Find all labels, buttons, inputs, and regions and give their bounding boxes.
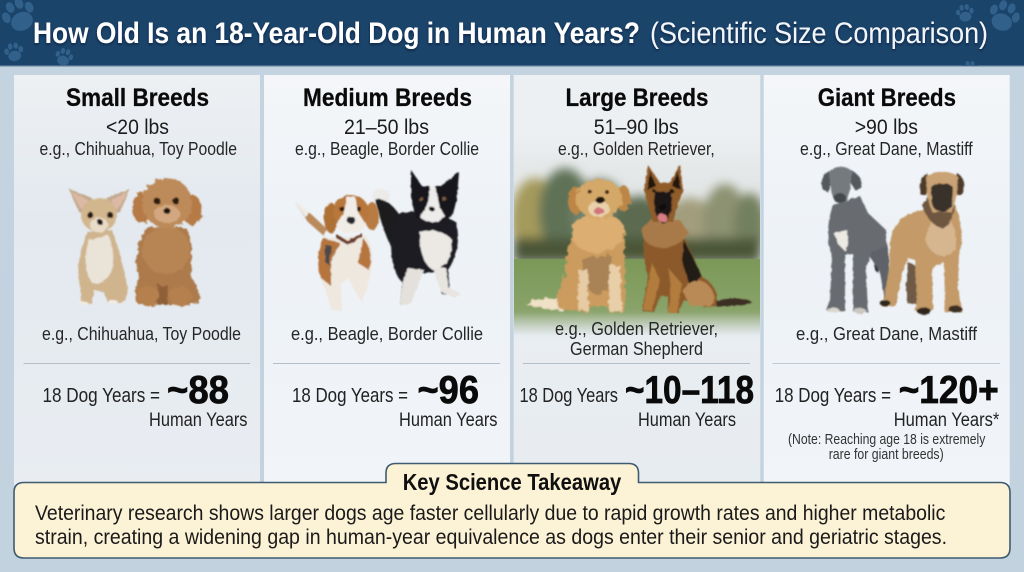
illustration: chihuahua	[69, 189, 130, 305]
heading: Large Breeds	[566, 84, 708, 112]
subtitle: (Scientific Size Comparison)	[650, 17, 988, 50]
illustration: golden retriever face	[588, 190, 610, 217]
callout body: Veterinary research shows larger dogs age faster cellularly due to rapid growth rates and higher metabolic	[35, 501, 946, 525]
human years label: Human Years*	[894, 410, 1000, 431]
age equation: 18 Dog Years =	[775, 384, 891, 407]
illustration: poodle face	[154, 198, 180, 223]
photo background: park	[514, 158, 760, 334]
illustration: mastiff	[880, 172, 964, 314]
weight range: 21–50 lbs	[344, 116, 429, 139]
example breeds repeated: e.g., Chihuahua, Toy Poodle	[42, 323, 241, 344]
age equation: 18 Dog Years	[520, 384, 618, 407]
illustration: toy poodle	[132, 178, 202, 306]
panel: giant breeds	[764, 75, 1010, 485]
weight range: <20 lbs	[106, 116, 169, 139]
weight range: >90 lbs	[855, 116, 918, 139]
human years label: Human Years	[638, 410, 736, 431]
callout heading: Key Science Takeaway	[403, 469, 621, 495]
age equation: 18 Dog Years =	[42, 384, 160, 407]
heading: Giant Breeds	[818, 84, 956, 112]
example breeds repeated: e.g., Golden Retriever,	[555, 318, 718, 339]
heading: Small Breeds	[66, 84, 209, 112]
header banner	[0, 0, 1024, 67]
callout body: strain, creating a widening gap in human-year equivalence as dogs enter their senior and geriatric stages.	[35, 525, 947, 549]
panel: medium breeds	[264, 75, 510, 485]
age value: ~96	[418, 369, 479, 412]
heading: Medium Breeds	[303, 84, 472, 112]
human years label: Human Years	[149, 410, 248, 431]
weight range: 51–90 lbs	[594, 116, 679, 139]
illustration: golden retriever	[526, 179, 630, 313]
callout body	[35, 501, 947, 549]
footnote: (Note: Reaching age 18 is extremely	[788, 432, 986, 448]
example breeds: e.g., Great Dane, Mastiff	[800, 138, 973, 159]
age value: ~88	[167, 369, 229, 412]
panel: large breeds	[511, 75, 766, 485]
example breeds: e.g., Golden Retriever,	[558, 138, 715, 159]
age equation: 18 Dog Years =	[292, 384, 408, 407]
example breeds: e.g., Beagle, Border Collie	[295, 138, 479, 159]
age value: ~10–118	[625, 369, 754, 412]
example breeds repeated: e.g., Beagle, Border Collie	[291, 323, 483, 344]
title: How Old Is an 18-Year-Old Dog in Human Years?	[33, 17, 640, 50]
example breeds repeated: e.g., Great Dane, Mastiff	[796, 323, 978, 344]
footnote	[788, 432, 986, 463]
footnote: rare for giant breeds)	[829, 447, 944, 463]
illustration: great dane	[822, 167, 896, 314]
human years label: Human Years	[399, 410, 498, 431]
illustration: beagle	[295, 195, 379, 311]
callout: key science takeaway	[14, 464, 1010, 558]
illustration: german shepherd	[642, 165, 752, 313]
example breeds second line: German Shepherd	[570, 338, 703, 359]
age value: ~120+	[899, 369, 999, 412]
illustration: border collie	[372, 170, 461, 305]
example breeds: e.g., Chihuahua, Toy Poodle	[40, 138, 237, 159]
icon: paw prints	[2, 0, 1020, 66]
panel: small breeds	[14, 75, 260, 485]
